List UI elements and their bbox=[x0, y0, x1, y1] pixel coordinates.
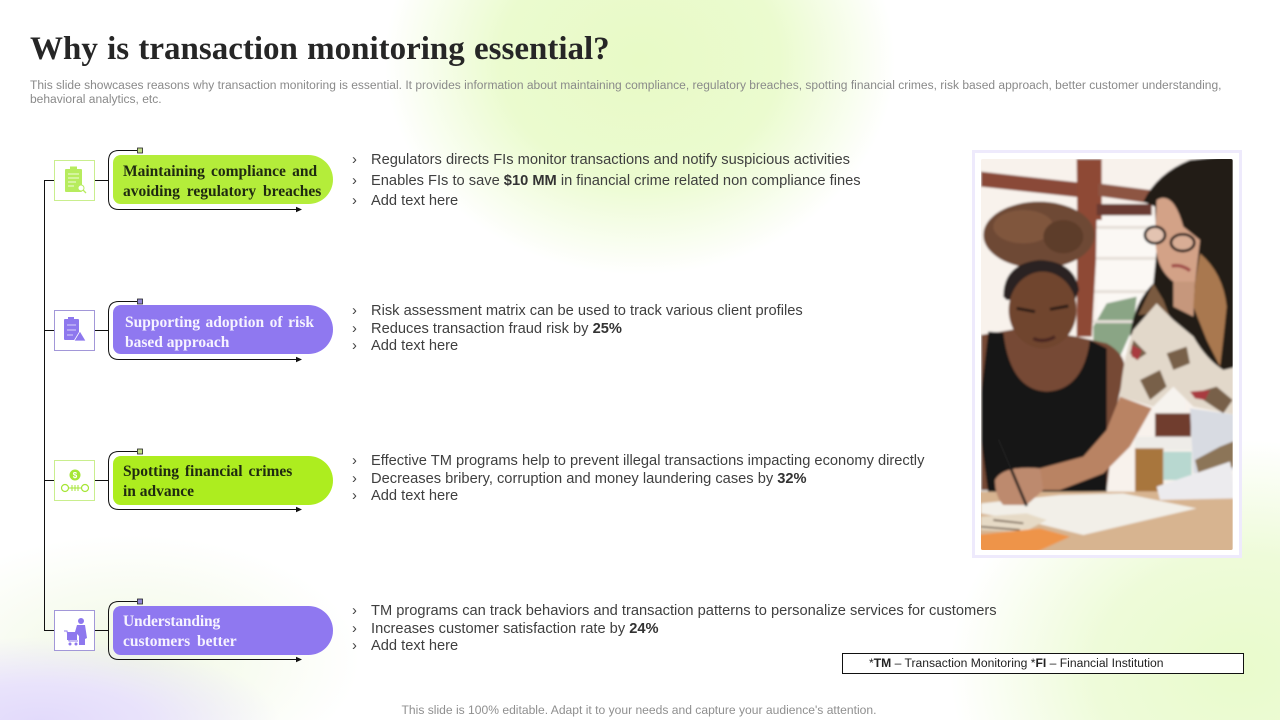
woman left bbox=[983, 202, 1095, 268]
row 4: customers: Increases customer satisfaction rate by 24% bbox=[371, 621, 659, 637]
row 1: maintaining compliance: › bbox=[352, 193, 357, 209]
pill: compliance heading: avoiding regulatory breaches bbox=[123, 183, 321, 200]
legend box: *TM – Transaction Monitoring *FI – Financial Institution bbox=[869, 656, 1164, 670]
row 2: risk based approach: Reduces transaction fraud risk by 25% bbox=[371, 321, 622, 337]
bullet list 2 bbox=[352, 303, 803, 354]
pill: compliance heading: Maintaining compliance and bbox=[123, 163, 317, 180]
bullet list 3 bbox=[352, 453, 924, 504]
row 4: customers: › bbox=[352, 638, 357, 654]
row 2: risk based approach: › bbox=[352, 338, 357, 354]
title: Why is transaction monitoring essential? bbox=[30, 31, 610, 67]
row 3: financial crimes: › bbox=[352, 453, 357, 469]
row 2: risk based approach: Risk assessment matrix can be used to track various client profiles bbox=[371, 303, 803, 319]
subtitle: This slide showcases reasons why transaction monitoring is essential. It provides information about maintaining compliance, regulatory breaches, spotting financial crimes, risk based approach, better customer understanding, bbox=[30, 78, 1222, 92]
pill: crimes heading: Spotting financial crimes bbox=[123, 463, 292, 480]
bracket arrow bbox=[108, 448, 302, 512]
row 3: financial crimes: Decreases bribery, corruption and money laundering cases by 32% bbox=[371, 471, 807, 487]
subtitle: behavioral analytics, etc. bbox=[30, 92, 162, 106]
icon: dollar network: $ bbox=[73, 471, 78, 480]
row 4: customers: TM programs can track behaviors and transaction patterns to personalize services for customers bbox=[371, 603, 997, 619]
woman right bbox=[1130, 155, 1237, 370]
footer note: This slide is 100% editable. Adapt it to your needs and capture your audience's attention. bbox=[402, 703, 876, 717]
subtitle bbox=[30, 78, 1222, 106]
bracket arrow bbox=[108, 598, 302, 662]
row 4: customers: Add text here bbox=[371, 638, 458, 654]
pill: customers heading: customers better bbox=[123, 633, 237, 650]
pill: customers heading bbox=[113, 606, 333, 655]
row 3: financial crimes bbox=[54, 448, 924, 512]
row 1: maintaining compliance: Regulators directs FIs monitor transactions and notify suspicious activities bbox=[371, 152, 850, 168]
row 4: customers bbox=[54, 598, 997, 662]
bullet list 4 bbox=[352, 603, 997, 654]
row 1: maintaining compliance: Add text here bbox=[371, 193, 458, 209]
row 2: risk based approach bbox=[54, 298, 803, 362]
row 2: risk based approach: Add text here bbox=[371, 338, 458, 354]
pill: crimes heading bbox=[113, 456, 333, 505]
legend box bbox=[842, 653, 1244, 674]
row 1: maintaining compliance: › bbox=[352, 173, 357, 189]
bullet list 1 bbox=[352, 152, 861, 209]
row 3: financial crimes: › bbox=[352, 471, 357, 487]
table bbox=[977, 492, 1237, 555]
row 1: maintaining compliance: › bbox=[352, 152, 357, 168]
bracket arrow bbox=[108, 298, 302, 362]
row 3: financial crimes: Add text here bbox=[371, 488, 458, 504]
pill: compliance heading bbox=[113, 155, 333, 204]
pill: crimes heading: in advance bbox=[123, 483, 194, 500]
row 4: customers: › bbox=[352, 621, 357, 637]
row 3: financial crimes: › bbox=[352, 488, 357, 504]
photo: two women working at a table bbox=[972, 150, 1242, 558]
icon: compliance clipboard bbox=[54, 160, 95, 201]
row 1: maintaining compliance bbox=[54, 148, 861, 212]
row 1: maintaining compliance: Enables FIs to save $10 MM in financial crime related non compliance fines bbox=[371, 173, 861, 189]
row 2: risk based approach: › bbox=[352, 303, 357, 319]
row 3: financial crimes: Effective TM programs help to prevent illegal transactions impacting economy directly bbox=[371, 453, 924, 469]
icon: dollar network bbox=[54, 460, 95, 501]
pill: customers heading: Understanding bbox=[123, 613, 220, 630]
row 2: risk based approach: › bbox=[352, 321, 357, 337]
pill: risk heading: based approach bbox=[125, 334, 229, 351]
pill: risk heading: Supporting adoption of risk bbox=[125, 314, 314, 331]
bracket arrow bbox=[108, 148, 302, 212]
row 4: customers: › bbox=[352, 603, 357, 619]
pill: risk heading bbox=[113, 305, 333, 354]
icon: customer with cart bbox=[54, 610, 95, 651]
icon: risk clipboard bbox=[54, 310, 95, 351]
